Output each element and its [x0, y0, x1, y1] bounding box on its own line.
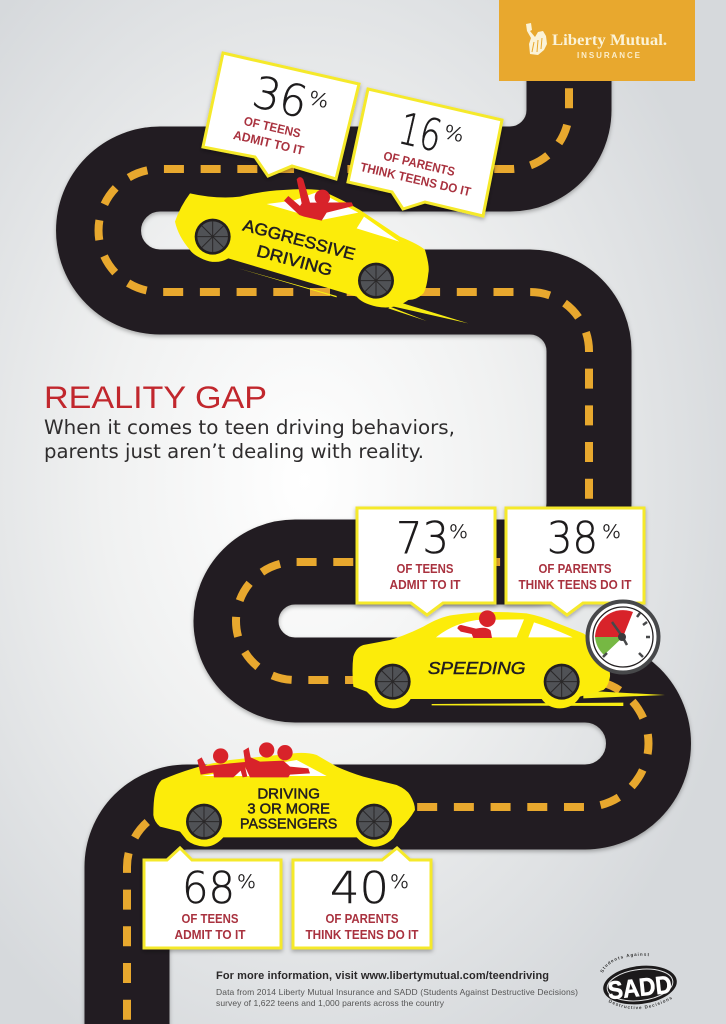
- label: OF TEENS: [182, 912, 238, 926]
- label: OF TEENS: [396, 562, 454, 576]
- label: ADMIT TO IT: [232, 128, 306, 158]
- callout: 16% of parents: [348, 89, 502, 216]
- logo: SADD: Destructive Decisions: [608, 997, 672, 1010]
- wheel: [186, 804, 222, 840]
- road centre dashes: [99, 60, 648, 1024]
- car body: [352, 612, 610, 708]
- icon: statue of liberty: [526, 23, 547, 55]
- label: [174, 912, 246, 942]
- label: [390, 562, 461, 592]
- windows: [267, 192, 358, 220]
- logo wordmark: Liberty Mutual.: [552, 32, 667, 49]
- subheading: parents just aren’t dealing with reality.: [44, 440, 424, 463]
- footer: data source: survey of 1,622 teens and 1,000 parents across the country: [216, 998, 445, 1008]
- label: [306, 912, 419, 942]
- car body: [153, 753, 415, 847]
- speed lines: [432, 691, 665, 706]
- logo: SADD: [600, 952, 677, 1010]
- percentage: %: [237, 871, 256, 893]
- percentage: 16: [394, 103, 446, 162]
- percentage: %: [390, 871, 409, 893]
- wheel: [195, 219, 231, 255]
- callout: 40% of parents: [293, 848, 431, 948]
- logo: SADD: Students Against: [600, 952, 649, 973]
- label: [359, 144, 476, 199]
- percentage: %: [602, 521, 621, 543]
- car label: DRIVING: [257, 785, 320, 802]
- driver with raised arms: [284, 177, 353, 221]
- wheel: [375, 664, 411, 700]
- callout: 38% of parents: [506, 508, 644, 615]
- percentage: 73: [396, 513, 449, 564]
- label: OF PARENTS: [382, 149, 456, 179]
- label: OF PARENTS: [538, 562, 612, 576]
- percentage: %: [442, 121, 466, 147]
- car label: AGGRESSIVE: [241, 216, 357, 264]
- wheel: [356, 804, 392, 840]
- needle: [612, 622, 627, 645]
- car: driving with passengers: [153, 742, 415, 847]
- label: OF TEENS: [242, 114, 302, 141]
- label: THINK TEENS DO IT: [359, 160, 473, 199]
- speed lines: [238, 268, 468, 323]
- wheel: [358, 263, 394, 299]
- subheading: When it comes to teen driving behaviors,: [44, 416, 455, 439]
- red zone: [595, 610, 633, 637]
- logo panel: Liberty Mutual: [499, 0, 695, 81]
- car label: PASSENGERS: [240, 816, 337, 833]
- wheel: [544, 664, 580, 700]
- percentage: 68: [182, 863, 235, 914]
- label: THINK TEENS DO IT: [518, 578, 632, 592]
- percentage: 38: [547, 513, 598, 564]
- car label: 3 OR MORE: [247, 800, 330, 817]
- car label: DRIVING: [255, 241, 335, 280]
- windows: [436, 619, 524, 637]
- logo: SADD: SADD: [607, 971, 673, 1005]
- footer: data source: Data from 2014 Liberty Mutual Insurance and SADD (Students Against Destructive Decisions): [216, 987, 578, 997]
- callout: 36% of teens: [203, 53, 359, 179]
- percentage: %: [449, 521, 468, 543]
- icon: speedometer: [588, 602, 658, 672]
- label: ADMIT TO IT: [390, 578, 461, 592]
- label: [518, 562, 632, 592]
- heading: REALITY GAP: [44, 379, 267, 415]
- driver: [457, 610, 496, 638]
- car label: [240, 785, 337, 833]
- windows: [202, 760, 327, 776]
- percentage: 36: [248, 67, 312, 129]
- percentage: %: [306, 87, 331, 113]
- green zone: [595, 637, 623, 655]
- label: OF PARENTS: [326, 912, 398, 926]
- subheading: [44, 416, 455, 463]
- label: [232, 112, 309, 158]
- car: speeding: [352, 610, 665, 708]
- callout: 73% of teens: [357, 508, 495, 615]
- logo subtitle: INSURANCE: [577, 51, 641, 60]
- car body: [175, 189, 429, 307]
- callout: 68% of teens: [144, 848, 281, 948]
- road: [99, 60, 648, 1024]
- footer: data source: [216, 987, 578, 1008]
- label: ADMIT TO IT: [174, 928, 246, 942]
- car label: SPEEDING: [428, 658, 525, 678]
- car label: [235, 216, 357, 285]
- car: aggressive driving: [175, 177, 468, 323]
- percentage: 40: [330, 863, 389, 914]
- footer: more info: For more information, visit www.libertymutual.com/teendriving: [216, 970, 549, 982]
- three passengers: [197, 742, 310, 777]
- label: THINK TEENS DO IT: [306, 928, 419, 942]
